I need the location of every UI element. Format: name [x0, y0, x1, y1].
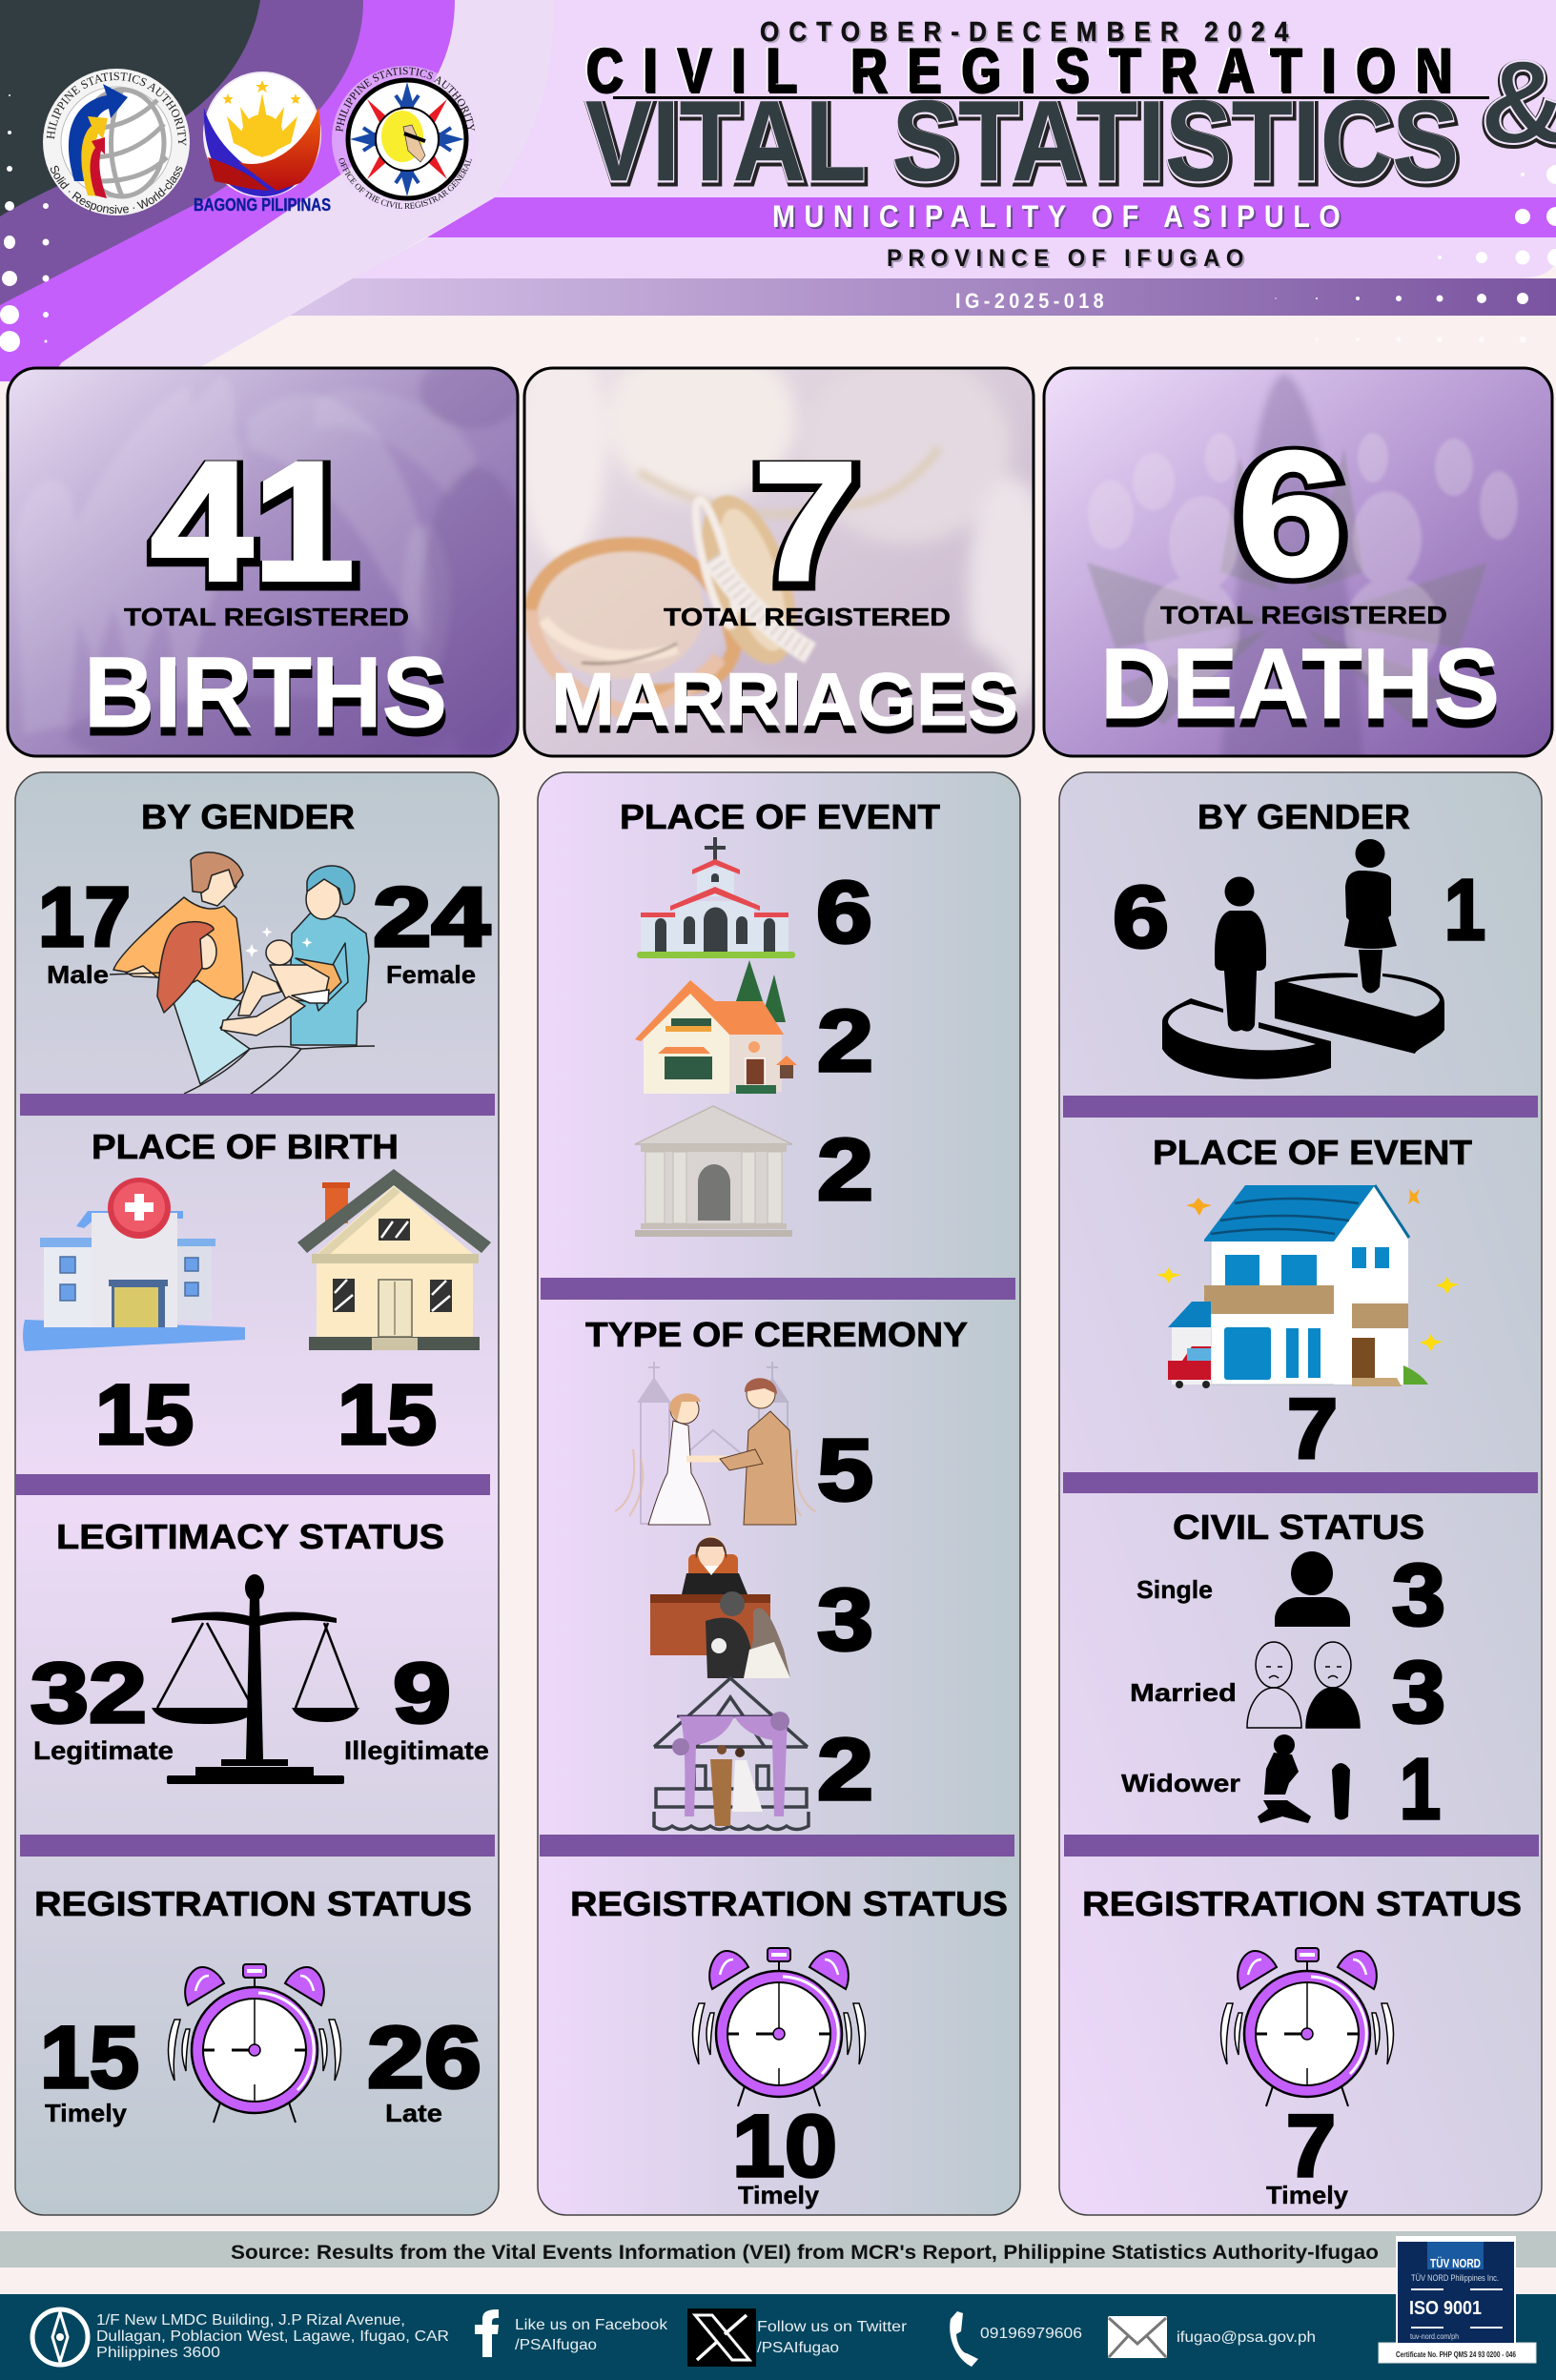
address: 1/F New LMDC Building, J.P Rizal Avenue,	[96, 2312, 405, 2329]
marriages label: MARRIAGES	[551, 657, 1018, 741]
row: widower: Widower	[1121, 1769, 1240, 1797]
stat: male deaths: 6	[1113, 869, 1169, 966]
icon: phone	[950, 2311, 978, 2367]
stat: legitimate births: Legitimate	[33, 1736, 174, 1765]
document code: IG-2025-018	[955, 290, 1104, 313]
period heading: OCTOBER-DECEMBER 2024	[760, 16, 1289, 47]
ISO 9001 badge: tuv-nord.com/ph	[1410, 2331, 1459, 2341]
stat: timely deaths: Timely	[1266, 2181, 1349, 2209]
stat: illegitimate births	[344, 1645, 489, 1765]
logo: Philippine Statistics Authority: Solid · Responsive · World-class	[50, 166, 183, 214]
icon: compass	[32, 2309, 88, 2365]
icon: home	[297, 1169, 491, 1350]
logo: Office of the Civil Registrar General: OFFICE OF THE CIVIL REGISTRAR GENERAL	[339, 158, 472, 209]
panel: marriages details	[538, 772, 1020, 2215]
icon: facebook	[475, 2309, 499, 2357]
heading: registration status: REGISTRATION STATUS	[1082, 1884, 1522, 1923]
ISO 9001 badge	[1379, 2236, 1536, 2363]
stat: timely births: 15	[40, 2009, 139, 2106]
icon: civil wedding before judge	[650, 1536, 790, 1678]
province: PROVINCE OF IFUGAO	[889, 247, 1245, 274]
twitter text: /PSAIfugao	[757, 2340, 839, 2356]
heading: registration status: REGISTRATION STATUS	[570, 1884, 1008, 1923]
twitter text	[757, 2319, 908, 2356]
logo: Bagong Pilipinas	[194, 72, 331, 215]
marriages label: MARRIAGES	[551, 665, 1020, 749]
ISO 9001 badge: ISO 9001	[1409, 2298, 1482, 2319]
row: widower	[1121, 1734, 1441, 1837]
stat: timely marriages: 10	[732, 2098, 837, 2195]
heading: place of birth: PLACE OF BIRTH	[92, 1127, 399, 1166]
births label: BIRTHS	[84, 646, 449, 757]
icon: church wedding	[615, 1362, 815, 1525]
marriages caption: TOTAL REGISTERED	[664, 603, 951, 631]
source band: Source: Results from the Vital Events Information (VEI) from MCR's Report, Philippine Statistics Authority-Ifugao	[231, 2241, 1379, 2264]
icon: envelope	[1108, 2316, 1167, 2358]
stat: male births: Male	[47, 960, 109, 989]
icon: alarm clock	[168, 1964, 341, 2123]
stat: church ceremonies: 5	[817, 1422, 873, 1519]
source band	[0, 2231, 1556, 2267]
panel: births details	[15, 772, 499, 2215]
icon: male and female on platforms	[1162, 839, 1444, 1079]
stat: legitimate births: 32	[31, 1645, 147, 1740]
twitter text: Follow us on Twitter	[757, 2319, 908, 2335]
ISO 9001 badge: TÜV NORD Philippines Inc.	[1411, 2273, 1499, 2284]
logo: Office of the Civil Registrar General: PHILIPPINE STATISTICS AUTHORITY	[336, 67, 475, 132]
row: widower: 1	[1400, 1742, 1441, 1837]
row: single: Single	[1136, 1575, 1213, 1604]
icon: church	[637, 837, 795, 958]
icon: wedding arch	[654, 1678, 809, 1829]
stat: timely births: Timely	[45, 2099, 128, 2127]
stat: female births: 24	[373, 870, 490, 964]
phone number: 09196979606	[980, 2326, 1082, 2342]
logo caption: BAGONG PILIPINAS	[194, 195, 331, 215]
stat: church weddings: 6	[816, 864, 872, 961]
icon: municipal hall	[635, 1106, 792, 1237]
logo: Office of the Civil Registrar General	[332, 66, 475, 209]
background image: veiled mourner and flowers	[1087, 374, 1518, 763]
icon: alarm clock	[1220, 1948, 1394, 2106]
icon: venue house	[635, 960, 797, 1094]
deaths label: DEATHS	[1100, 637, 1500, 749]
total marriages number: 7	[753, 426, 858, 616]
stat: late births: 26	[367, 2009, 481, 2106]
icon: alarm clock	[692, 1948, 866, 2106]
heading: legitimacy status: LEGITIMACY STATUS	[56, 1517, 444, 1556]
illustration: family with newborn	[110, 852, 375, 1095]
icon: X	[687, 2308, 756, 2367]
address	[96, 2312, 449, 2361]
stat: venue weddings: 2	[817, 993, 873, 1090]
heading: registration status: REGISTRATION STATUS	[34, 1884, 472, 1923]
header title block	[584, 16, 1556, 313]
ISO 9001 badge: Certificate No. PHP QMS 24 93 0200 - 046	[1396, 2350, 1516, 2359]
footer	[0, 2294, 1556, 2380]
stat: timely marriages: Timely	[738, 2181, 820, 2209]
province: PROVINCE OF IFUGAO	[887, 245, 1243, 272]
total marriages number: 7	[751, 430, 862, 622]
facebook text: /PSAIfugao	[515, 2337, 597, 2353]
decorative dots	[0, 94, 1556, 352]
panel: deaths details	[1059, 772, 1542, 2215]
stat: other ceremonies: 2	[817, 1721, 873, 1818]
stat: municipal hall weddings: 2	[817, 1121, 873, 1219]
births label: BIRTHS	[84, 637, 447, 749]
icon: hospital	[23, 1178, 245, 1351]
panel: total marriages	[522, 366, 1035, 757]
icon: house with car	[1157, 1185, 1459, 1388]
title: Civil Registration: CIVIL REGISTRATION	[584, 33, 1449, 104]
stat: timely deaths: 7	[1286, 2098, 1336, 2195]
panel: total births	[8, 353, 534, 772]
stat: deaths at home: 7	[1287, 1381, 1338, 1476]
total deaths number: 6	[1238, 416, 1344, 613]
stat: female births: Female	[386, 960, 476, 989]
total births number: 41	[151, 426, 355, 616]
stat: home births: 15	[338, 1366, 437, 1462]
title: Civil Registration: CIVIL REGISTRATION	[585, 34, 1451, 105]
heading: place of event: PLACE OF EVENT	[1153, 1133, 1472, 1172]
facebook text: Like us on Facebook	[515, 2317, 668, 2333]
row: married: 3	[1392, 1644, 1445, 1741]
row: married: Married	[1130, 1678, 1237, 1707]
births caption: TOTAL REGISTERED	[124, 603, 409, 631]
stat: male births: 17	[38, 870, 131, 964]
heading: type of ceremony: TYPE OF CEREMONY	[585, 1315, 968, 1354]
stat: illegitimate births: 9	[393, 1645, 451, 1740]
municipality: MUNICIPALITY OF ASIPULO	[772, 200, 1341, 234]
header background bands	[0, 0, 1556, 381]
facebook text	[515, 2317, 668, 2353]
heading: by gender: BY GENDER	[141, 797, 355, 836]
municipality: MUNICIPALITY OF ASIPULO	[774, 202, 1342, 236]
total deaths number: 6	[1234, 417, 1348, 614]
deaths caption: TOTAL REGISTERED	[1160, 601, 1447, 629]
panel: total deaths	[1044, 368, 1552, 763]
heading: by gender: BY GENDER	[1198, 797, 1410, 836]
deaths label: DEATHS	[1100, 628, 1500, 740]
stat: civil ceremonies: 3	[817, 1571, 873, 1669]
heading: place of event: PLACE OF EVENT	[620, 797, 940, 836]
period heading: OCTOBER-DECEMBER 2024	[762, 18, 1291, 49]
heading: civil status: CIVIL STATUS	[1173, 1508, 1424, 1547]
stat: legitimate births	[31, 1645, 174, 1765]
email: ifugao@psa.gov.ph	[1177, 2329, 1316, 2346]
logo: Philippine Statistics Authority	[43, 69, 190, 215]
address: Dullagan, Poblacion West, Lagawe, Ifugao, CAR	[96, 2329, 449, 2345]
icon: scales of justice	[152, 1574, 359, 1784]
stat: late births: Late	[385, 2099, 442, 2127]
stat: female deaths: 1	[1444, 863, 1485, 958]
title: Civil Registration: CIVIL REGISTRATION	[587, 35, 1453, 106]
address: Philippines 3600	[96, 2345, 220, 2361]
stat: timely deaths	[1266, 2098, 1349, 2209]
background image: wedding rings	[526, 370, 1032, 728]
background image: hands	[19, 370, 517, 755]
stat: female births	[373, 870, 490, 989]
stat: hospital births: 15	[95, 1366, 194, 1462]
total births number: 41	[151, 430, 358, 622]
row: married	[1130, 1642, 1445, 1741]
row: single: 3	[1392, 1547, 1445, 1644]
ISO 9001 badge: TÜV NORD	[1430, 2256, 1481, 2270]
row: single	[1136, 1547, 1445, 1644]
stat: illegitimate births: Illegitimate	[344, 1736, 489, 1765]
